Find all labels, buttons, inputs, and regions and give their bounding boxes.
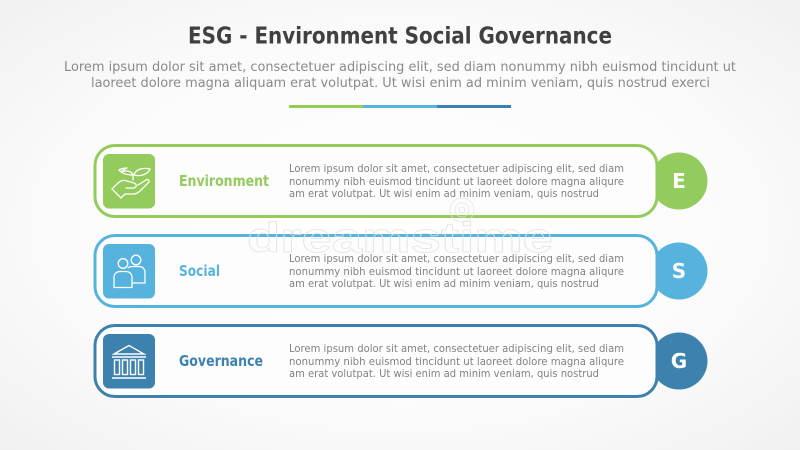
badge: S <box>650 242 708 300</box>
tri-colour divider <box>289 105 511 108</box>
description: governance: am erat volutpat. Ut wisi enim ad minim veniam, quis nostrud <box>289 367 599 380</box>
label: Governance: Governance <box>179 352 263 370</box>
icon: institution building <box>103 334 155 388</box>
label: Social: Social <box>179 262 220 280</box>
description: governance: Lorem ipsum dolor sit amet, consectetuer adipiscing elit, sed diam <box>289 342 624 355</box>
row outline: governance <box>95 326 657 396</box>
description: environment: Lorem ipsum dolor sit amet, consectetuer adipiscing elit, sed diam <box>289 162 624 175</box>
description: environment <box>289 162 624 200</box>
description: social: nonummy nibh euismod tincidunt ut laoreet dolore magna aliqure <box>289 265 624 278</box>
subtitle text: Lorem ipsum dolor sit amet, consectetuer adipiscing elit, sed diam nonummy nibh euismod tincidunt ut <box>64 59 736 75</box>
badge: E: E <box>672 169 686 193</box>
badge: G <box>650 332 708 390</box>
badge: E <box>650 152 708 210</box>
panel: environment <box>95 146 708 216</box>
icon: hand holding plant <box>103 154 155 208</box>
row outline: social <box>95 236 657 306</box>
subtitle text: laoreet dolore magna aliquam erat volutpat. Ut wisi enim ad minim veniam, quis nostrud exerci <box>91 75 710 91</box>
description: environment: am erat volutpat. Ut wisi enim ad minim veniam, quis nostrud <box>289 187 599 200</box>
description: social <box>289 252 624 290</box>
label: Environment: Environment <box>179 172 269 190</box>
badge: S: S <box>672 259 686 283</box>
description: environment: nonummy nibh euismod tincidunt ut laoreet dolore magna aliqure <box>289 175 624 188</box>
watermark <box>247 198 553 261</box>
panel: governance <box>95 326 708 396</box>
description: governance <box>289 342 624 380</box>
row outline: environment <box>95 146 657 216</box>
description: governance: nonummy nibh euismod tincidunt ut laoreet dolore magna aliqure <box>289 355 624 368</box>
description: social: am erat volutpat. Ut wisi enim ad minim veniam, quis nostrud <box>289 277 599 290</box>
badge: G: G <box>671 349 687 373</box>
description: social: Lorem ipsum dolor sit amet, consectetuer adipiscing elit, sed diam <box>289 252 624 265</box>
subtitle text <box>64 59 736 91</box>
icon: people <box>103 244 155 298</box>
panel: social <box>95 236 708 306</box>
watermark: dreamstime <box>247 214 553 261</box>
title: ESG - Environment Social Governance <box>188 24 612 50</box>
